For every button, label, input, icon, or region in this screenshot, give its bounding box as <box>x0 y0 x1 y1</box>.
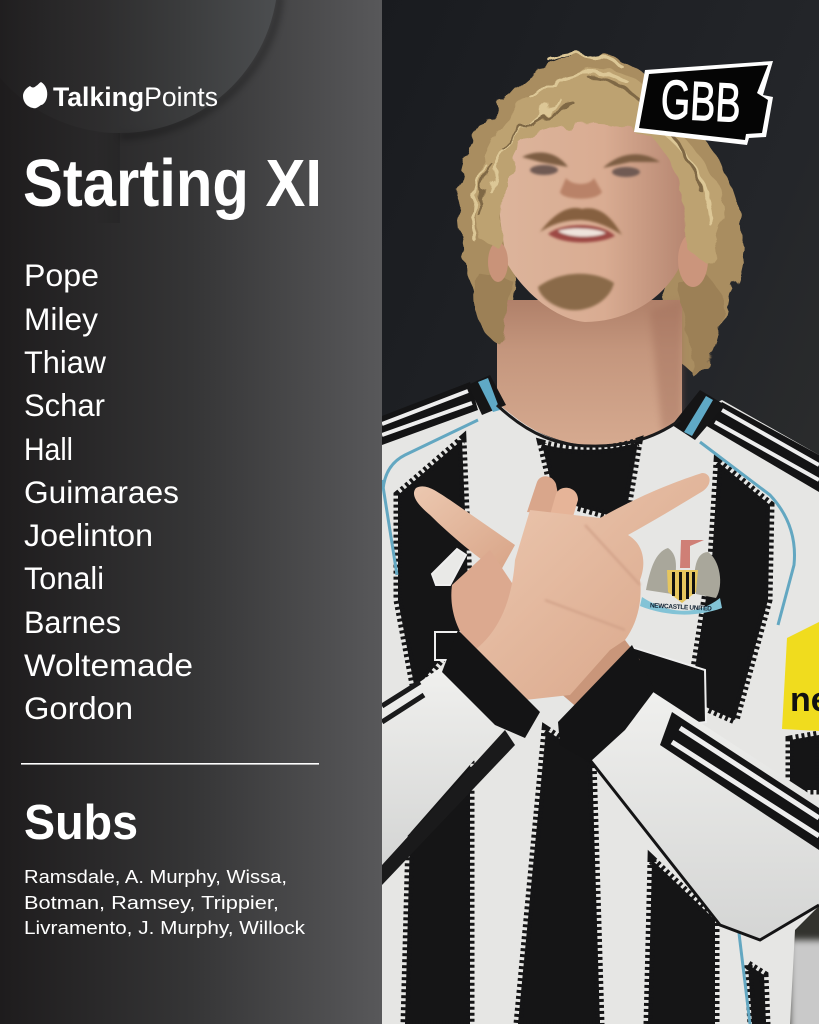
GBB badge <box>634 61 773 145</box>
hair back <box>458 55 743 375</box>
front hand <box>475 473 710 700</box>
list: starting eleven players: Guimaraes <box>24 474 179 510</box>
shirt body <box>382 385 819 1024</box>
club crest: NEWCASTLE UNITED <box>650 602 712 613</box>
list: starting eleven players: Schar <box>24 387 105 423</box>
panel: player photo illustration <box>382 0 819 1024</box>
text block: substitutes <box>24 866 306 938</box>
facial features <box>522 152 660 310</box>
back hand <box>451 558 512 648</box>
logo: TalkingPoints: TalkingPoints <box>53 82 218 112</box>
club crest <box>640 540 722 615</box>
wrist behind <box>563 640 640 705</box>
left finger <box>414 486 515 572</box>
list: starting eleven players: Barnes <box>24 604 121 640</box>
cuff right <box>558 645 655 762</box>
text block: substitutes: Botman, Ramsey, Trippier, <box>24 892 279 913</box>
list: starting eleven players: Thiaw <box>24 344 106 380</box>
list: starting eleven players: Pope <box>24 257 99 293</box>
list: starting eleven players: Tonali <box>24 560 104 596</box>
shirt: black stripes <box>398 440 819 1024</box>
neck <box>497 300 682 446</box>
heading: Starting XI: Starting XI <box>23 146 322 221</box>
sleeve right <box>590 690 819 940</box>
panel: team sheet background <box>0 0 382 1024</box>
cuff left <box>442 630 540 738</box>
text block: substitutes: Livramento, J. Murphy, Willock <box>24 917 306 938</box>
list: starting eleven players: Gordon <box>24 690 133 726</box>
list: starting eleven players: Miley <box>24 301 98 337</box>
hair top <box>475 69 725 262</box>
heading: Subs: Subs <box>24 796 138 850</box>
GBB badge: GBB <box>659 68 743 134</box>
list: starting eleven players: Joelinton <box>24 517 153 553</box>
list: starting eleven players: Woltemade <box>24 647 193 683</box>
list: starting eleven players: Hall <box>24 431 73 467</box>
text block: substitutes: Ramsdale, A. Murphy, Wissa, <box>24 866 287 887</box>
sleeve left <box>382 668 474 864</box>
list: starting eleven players <box>24 257 193 726</box>
sponsor fragments <box>432 549 706 730</box>
shirt: shoulder stripes and collar <box>382 375 819 1024</box>
captain armband <box>782 622 819 731</box>
face <box>500 122 686 322</box>
hair sides <box>476 265 723 378</box>
